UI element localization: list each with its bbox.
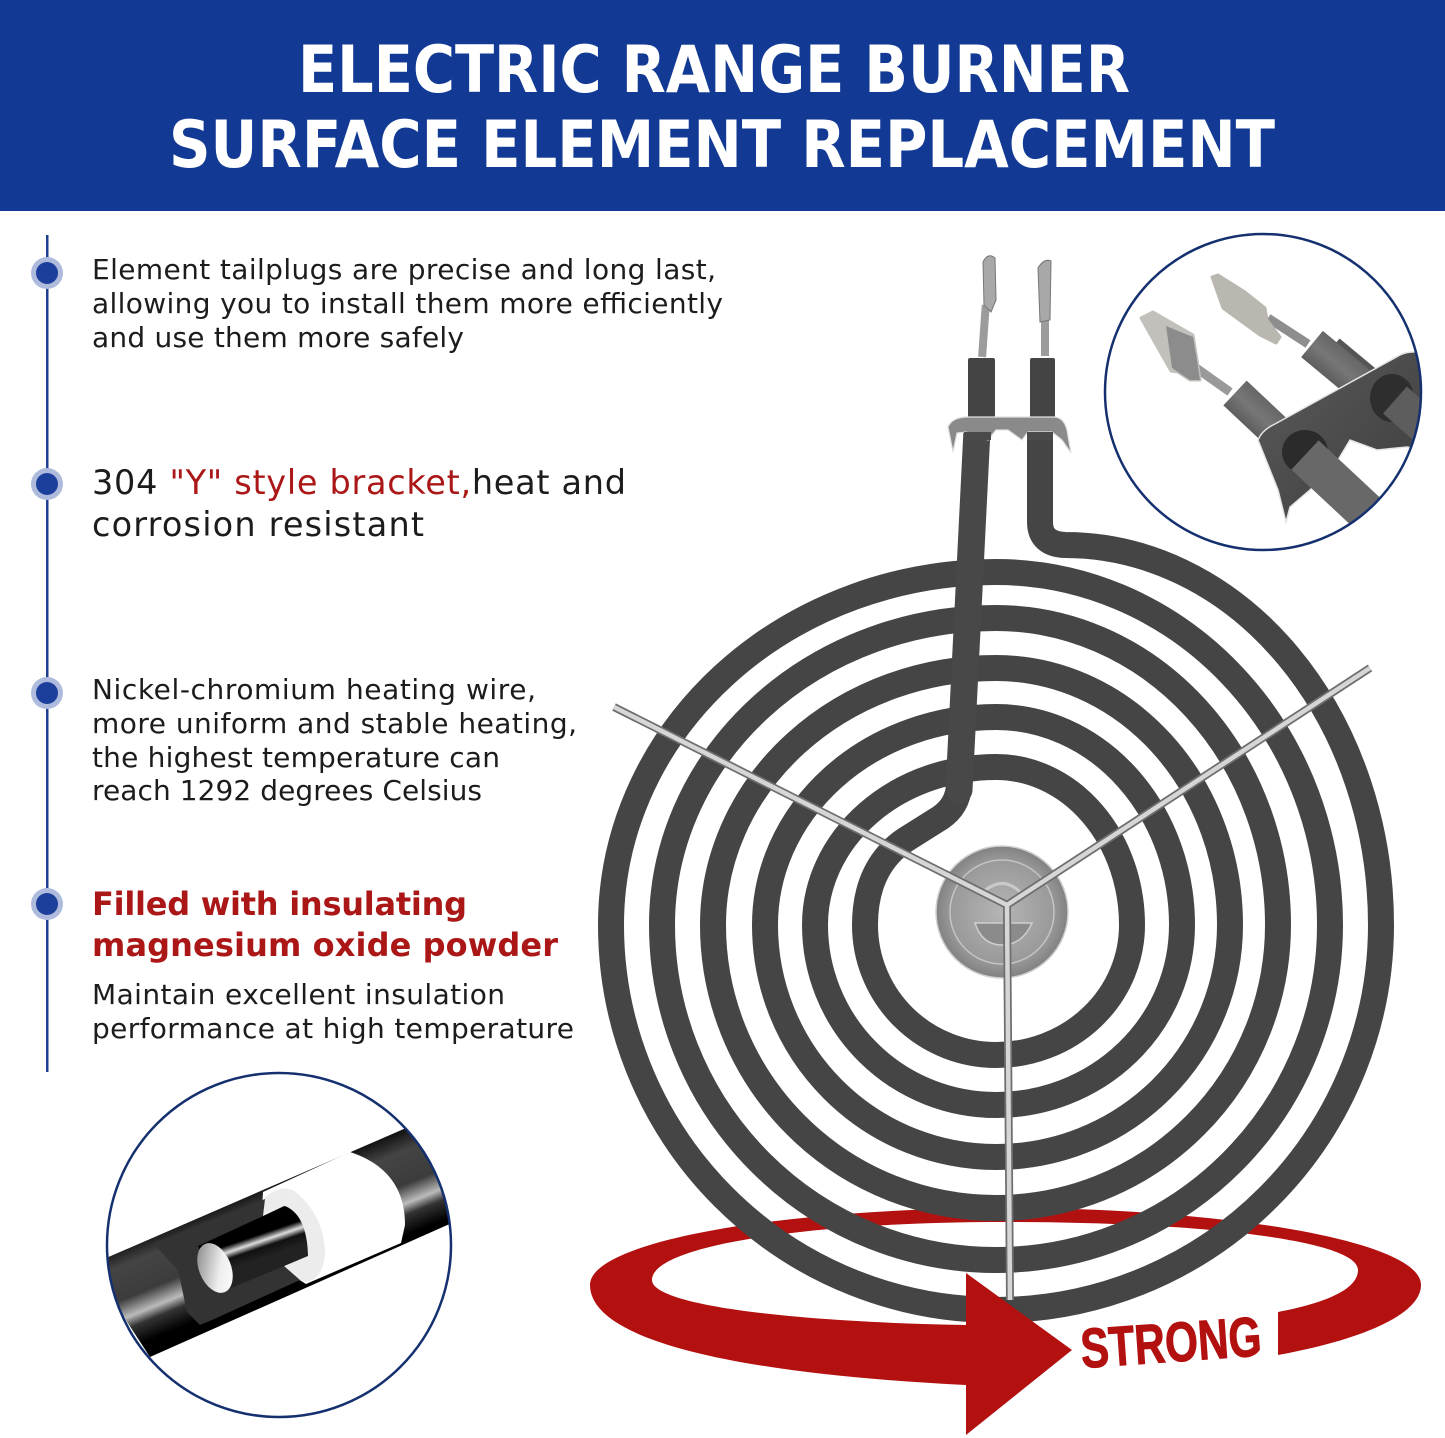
near pin — [1192, 365, 1230, 392]
far pin — [1268, 318, 1308, 344]
text block: bracket: 304 "Y" style bracket,heat and — [92, 463, 626, 502]
heating coil spiral — [611, 430, 1381, 1310]
detail circle: tailplugs — [1105, 234, 1440, 550]
far tube — [1336, 338, 1375, 370]
text block: bracket — [92, 463, 626, 544]
insulation — [262, 1152, 405, 1284]
near sleeve — [1235, 393, 1285, 440]
terminal: left — [978, 256, 996, 357]
three-arm support bracket — [614, 668, 1370, 1300]
tube: left stem — [959, 430, 977, 790]
tailplug terminals and bracket — [948, 256, 1071, 453]
y bracket — [948, 417, 1071, 453]
text block: heating wire: Nickel-chromium heating wire, — [92, 673, 536, 706]
bracket plate — [1258, 352, 1425, 522]
arrow head — [966, 1273, 1072, 1435]
center hub — [936, 846, 1068, 978]
outer tube — [108, 1128, 448, 1357]
core wire — [198, 1206, 308, 1292]
far blade — [1212, 275, 1280, 343]
terminal: right — [1038, 260, 1051, 356]
near tube — [1305, 455, 1380, 525]
rotation ring: strong arrow band — [590, 1208, 1421, 1385]
sleeves — [968, 358, 1055, 420]
powder ring — [263, 1189, 325, 1282]
wire end — [197, 1243, 233, 1293]
text block: insulating powder: magnesium oxide powder — [92, 926, 558, 964]
text block: heating wire: reach 1292 degrees Celsius — [92, 774, 482, 807]
text block: tailplugs: allowing you to install them more efficiently — [92, 287, 723, 320]
text block: insulating powder: Maintain excellent insulation — [92, 978, 505, 1011]
title banner: ELECTRIC RANGE BURNER — [298, 33, 1130, 108]
title banner: SURFACE ELEMENT REPLACEMENT — [169, 108, 1275, 183]
second tube — [1395, 400, 1440, 440]
text block: heating wire — [92, 673, 577, 807]
strong label: STRONG — [1078, 1304, 1263, 1380]
text block: tailplugs — [92, 253, 723, 354]
cavity — [153, 1199, 307, 1325]
text block: insulating powder: Filled with insulating — [92, 885, 467, 923]
text block: tailplugs: Element tailplugs are precise and long last, — [92, 253, 716, 286]
text block: heating wire: more uniform and stable heating, — [92, 707, 577, 740]
detail circle: insulation cutaway — [90, 1073, 470, 1417]
text block: insulating powder — [92, 885, 574, 1045]
timeline with bullet markers — [31, 235, 63, 1072]
text block: tailplugs: and use them more safely — [92, 321, 464, 354]
near blade — [1141, 312, 1200, 380]
title banner — [0, 0, 1445, 211]
text block: heating wire: the highest temperature can — [92, 741, 500, 774]
text block: insulating powder: performance at high temperature — [92, 1012, 574, 1045]
text block: bracket: corrosion resistant — [92, 505, 424, 544]
far sleeve — [1312, 344, 1365, 388]
